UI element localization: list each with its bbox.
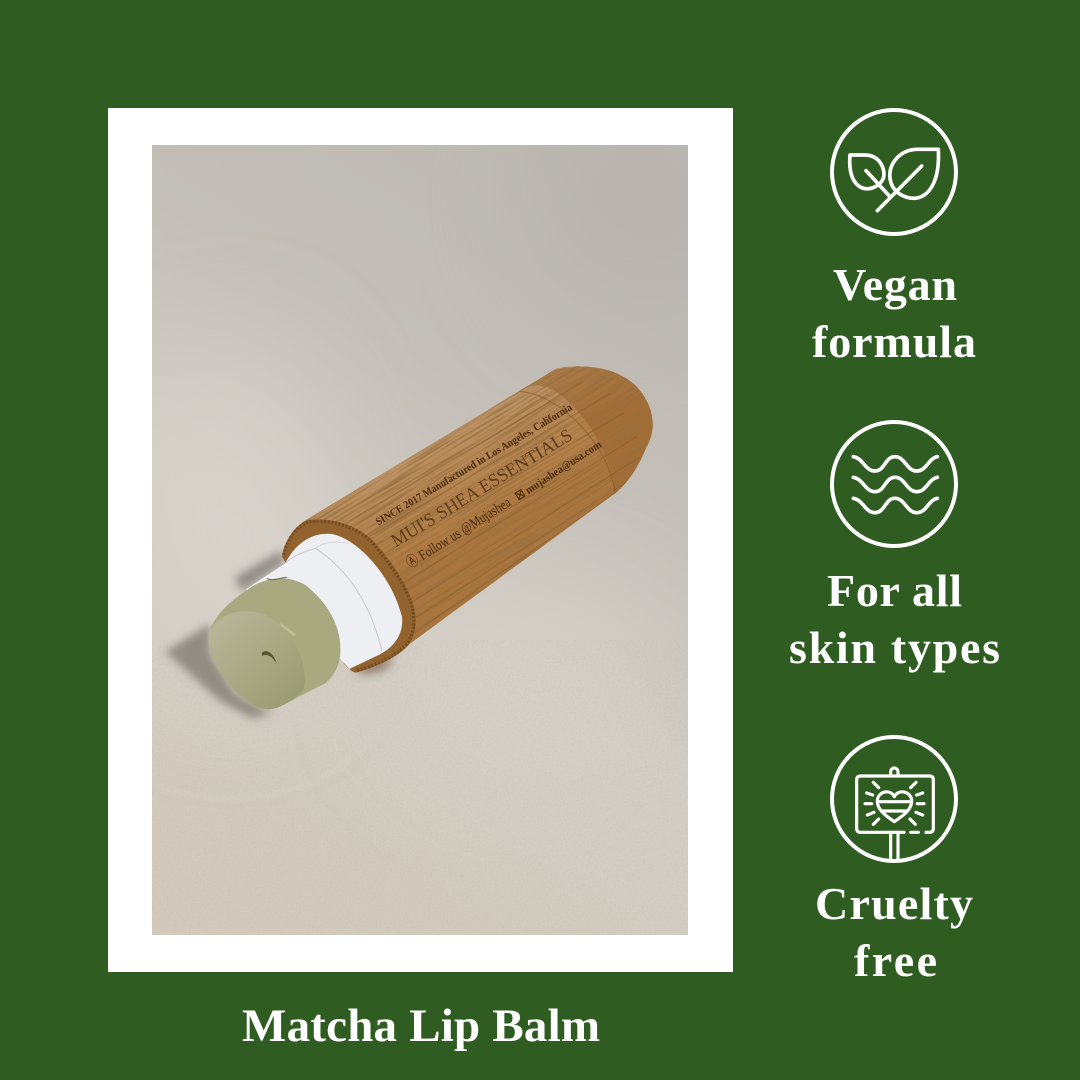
cap seam xyxy=(520,392,615,493)
label: for all skin types: skin types xyxy=(789,622,1000,673)
engraved text xyxy=(374,401,604,572)
panel: product photo xyxy=(101,90,750,935)
label: cruelty free xyxy=(815,878,973,986)
feature: vegan formula xyxy=(812,110,976,367)
balm centre hole xyxy=(262,651,277,664)
label: vegan formula: Vegan xyxy=(833,259,957,310)
label: for all skin types xyxy=(789,565,1000,673)
icon: leaves in circle xyxy=(832,110,956,234)
label: cruelty free: Cruelty xyxy=(815,878,973,929)
photo: bamboo lip balm tube xyxy=(101,293,739,783)
engraved text: Ⓐ Follow us @Mujashea xyxy=(403,494,514,572)
engraved text: SINCE 2017 Manufactured in Los Angeles, California xyxy=(374,401,575,528)
icon: heart sign in circle xyxy=(832,737,956,861)
white sleeve xyxy=(246,534,402,669)
balm side xyxy=(209,578,340,708)
photo shadows xyxy=(165,550,395,718)
wood grain xyxy=(282,366,653,646)
label: cruelty free: free xyxy=(854,935,937,986)
tube cap xyxy=(520,367,653,493)
balm and sleeve group xyxy=(208,519,416,709)
engraved text: ☒ mujashea@usa.com xyxy=(513,438,604,503)
feature: cruelty free xyxy=(815,737,973,986)
label: vegan formula xyxy=(812,259,976,367)
icon: waves in circle xyxy=(832,422,956,546)
balm top face xyxy=(208,611,305,709)
balm crack xyxy=(267,577,287,580)
panel: white photo frame xyxy=(108,108,733,972)
label: vegan formula: formula xyxy=(812,316,976,367)
panel caption: Matcha Lip Balm xyxy=(242,1000,600,1052)
label: for all skin types: For all xyxy=(827,565,962,616)
feature: for all skin types xyxy=(789,422,1000,673)
tube body xyxy=(282,366,647,672)
engraved text: MUI'S SHEA ESSENTIALS xyxy=(388,425,576,552)
open end wooden ring xyxy=(282,519,416,673)
